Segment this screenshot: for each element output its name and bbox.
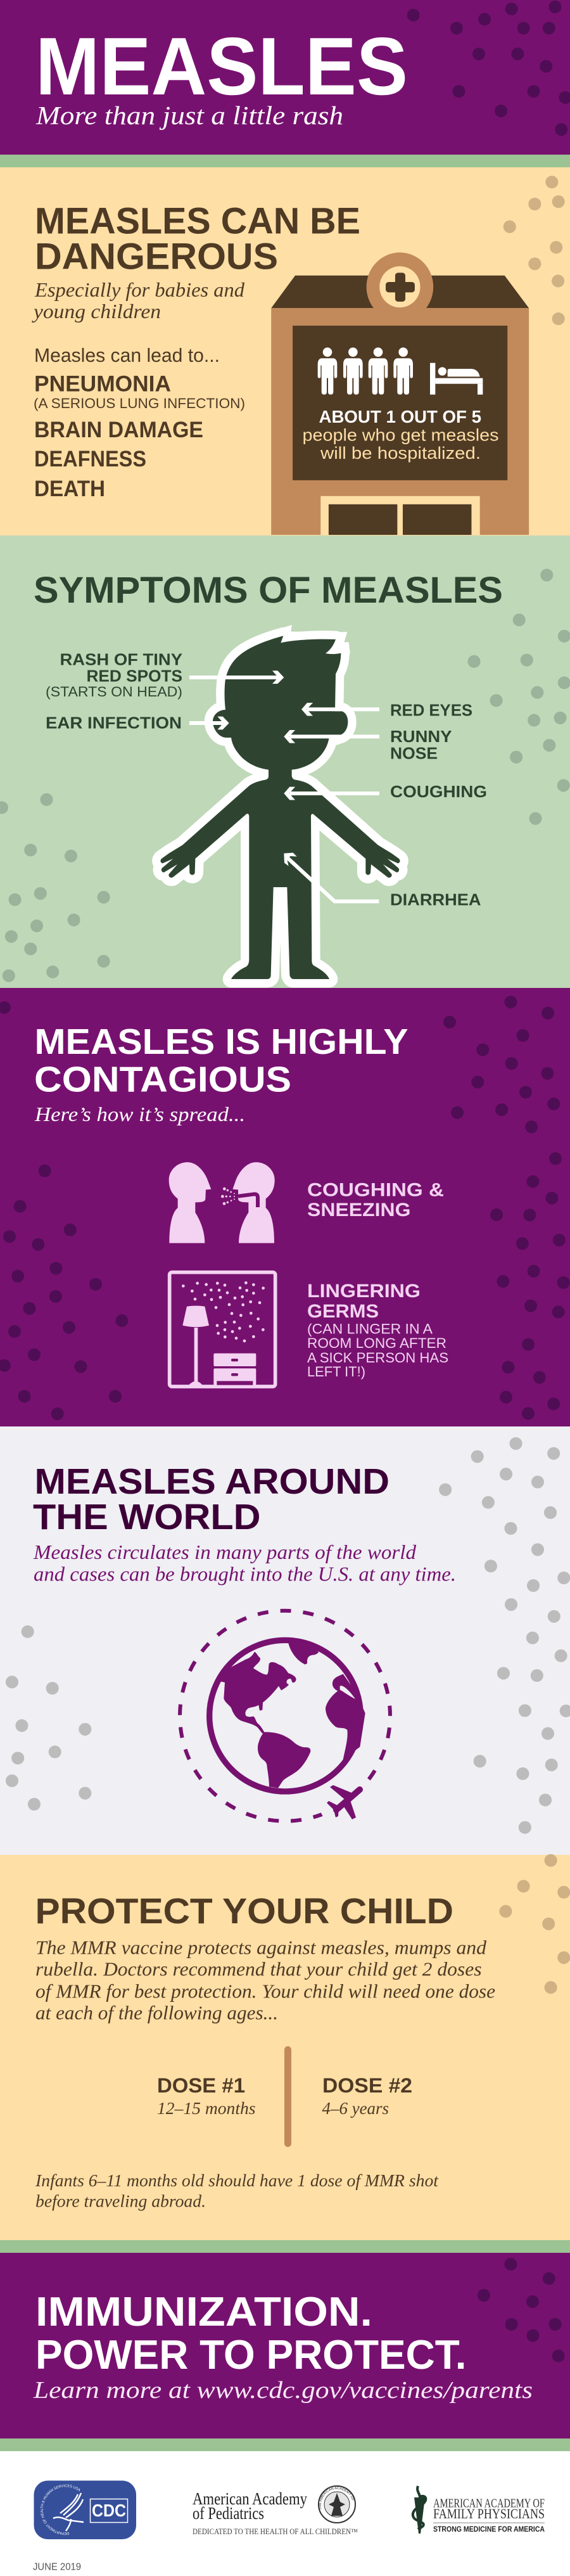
list of complications (34, 344, 245, 501)
dose 1: 12–15 months (157, 2099, 256, 2118)
text: lingering germs: LINGERING (307, 1281, 421, 1302)
description (33, 1541, 456, 1586)
note on infants: before traveling abroad. (35, 2191, 206, 2210)
panel: immunization call to action (0, 2253, 570, 2438)
body text: rubella. Doctors recommend that your child get 2 doses (35, 1958, 481, 1980)
symptom labels right (390, 701, 487, 909)
divider band (0, 2240, 570, 2253)
dose 1 (157, 2074, 256, 2118)
symptom labels left: RED SPOTS (86, 667, 182, 686)
callout: hospitalization statistic (303, 407, 499, 463)
symptom labels right: NOSE (390, 744, 438, 763)
list of complications: PNEUMONIA (34, 371, 171, 397)
note on infants (35, 2171, 440, 2210)
hospital building (271, 252, 529, 535)
body text: of MMR for best protection. Your child will need one dose (35, 1980, 495, 2002)
text: coughing and sneezing (307, 1180, 444, 1221)
panel: header (0, 0, 570, 155)
heading: MEASLES CAN BE (35, 200, 360, 242)
panel: protect your child (0, 1855, 570, 2241)
subheading: young children (32, 300, 161, 323)
callout: hospitalization statistic: will be hospitalized. (320, 444, 481, 463)
heading: CONTAGIOUS (34, 1060, 291, 1100)
logo: American Academy of Pediatrics: DEDICATED TO THE HEALTH OF ALL CHILDREN™ (193, 2527, 358, 2536)
symptom labels left: RASH OF TINY (60, 650, 182, 669)
heading: SYMPTOMS OF MEASLES (34, 570, 503, 611)
divider bar (284, 2046, 291, 2147)
panel: measles can be dangerous (0, 167, 570, 535)
subheading: Here’s how it’s spread... (34, 1103, 245, 1125)
panel: symptoms of measles (0, 535, 570, 988)
list of complications: DEATH (34, 477, 105, 501)
text: coughing and sneezing: SNEEZING (307, 1200, 410, 1221)
callout: hospitalization statistic: people who get measles (303, 426, 499, 445)
note on infants: Infants 6–11 months old should have 1 dose of MMR shot (35, 2171, 440, 2190)
symptom labels left: EAR INFECTION (46, 714, 182, 733)
panel: measles is highly contagious (0, 988, 570, 1426)
text: lingering germs: LEFT IT!) (307, 1364, 365, 1380)
description: and cases can be brought into the U.S. at any time. (34, 1563, 456, 1586)
subtitle: More than just a little rash (35, 101, 343, 130)
heading (33, 1461, 390, 1537)
icon: two people, coughing (169, 1162, 275, 1243)
heading: THE WORLD (33, 1497, 261, 1537)
text: lingering germs (307, 1281, 448, 1380)
list of complications: (A SERIOUS LUNG INFECTION) (34, 395, 245, 411)
icon: room with lingering germs (170, 1272, 276, 1387)
subheading: Especially for babies and (34, 278, 245, 301)
heading (34, 1022, 408, 1100)
text: lingering germs: ROOM LONG AFTER (307, 1335, 446, 1351)
logo: American Academy of Pediatrics: of Pediatrics (193, 2504, 264, 2523)
dose 2 (322, 2074, 412, 2118)
arrows to symptoms (189, 670, 379, 901)
text: lingering germs: (CAN LINGER IN A (307, 1321, 433, 1337)
slogan: POWER TO PROTECT. (35, 2331, 466, 2378)
divider band (0, 155, 570, 167)
icon: globe (210, 1640, 365, 1791)
symptom labels right: RUNNY (390, 727, 452, 746)
logo: American Academy of Pediatrics: THE AMERICAN ACADEMY OF (319, 2487, 355, 2509)
logo: American Academy of Family Physicians: STRONG MEDICINE FOR AMERICA (433, 2525, 545, 2534)
heading (35, 200, 360, 278)
panel: footer logos (33, 2480, 545, 2573)
list of complications: BRAIN DAMAGE (34, 418, 203, 442)
symptom labels right: RED EYES (390, 701, 472, 720)
panel: measles around the world (0, 1426, 570, 1855)
callout: hospitalization statistic: ABOUT 1 OUT OF 5 (319, 407, 481, 426)
list of complications: DEAFNESS (34, 447, 146, 471)
symptom labels right: COUGHING (390, 782, 487, 801)
heading: MEASLES IS HIGHLY (34, 1022, 408, 1062)
subheading (32, 278, 245, 323)
symptom labels right: DIARRHEA (390, 890, 481, 909)
logo: HHS and CDC: DEPARTMENT OF HEALTH & HUMAN SERVICES USA (41, 2484, 80, 2535)
logo: American Academy of Pediatrics (193, 2485, 358, 2536)
list of complications: Measles can lead to... (34, 344, 220, 366)
logo: HHS and CDC (34, 2480, 136, 2539)
icon: airplane (327, 1785, 360, 1819)
dose 2: DOSE #2 (322, 2074, 412, 2097)
heading: MEASLES AROUND (34, 1461, 390, 1502)
child silhouette (160, 625, 400, 979)
title: MEASLES (35, 21, 408, 112)
text: lingering germs: A SICK PERSON HAS (307, 1350, 448, 1366)
body text: at each of the following ages... (35, 2001, 278, 2024)
dose 1: DOSE #1 (157, 2074, 245, 2097)
dose 2: 4–6 years (322, 2099, 389, 2118)
learn more link: Learn more at www.cdc.gov/vaccines/parents (33, 2377, 533, 2404)
symptom labels left (46, 650, 182, 733)
symptom labels left: (STARTS ON HEAD) (46, 684, 182, 700)
text: lingering germs: GERMS (307, 1301, 379, 1322)
date: JUNE 2019 (33, 2561, 81, 2573)
slogan (35, 2288, 466, 2378)
slogan: IMMUNIZATION. (35, 2288, 372, 2335)
logo: American Academy of Family Physicians: FAMILY PHYSICIANS (433, 2506, 545, 2522)
logo: American Academy of Family Physicians (413, 2486, 545, 2534)
logo: American Academy of Pediatrics: American Academy (193, 2489, 307, 2508)
text: coughing and sneezing: COUGHING & (307, 1180, 444, 1200)
heading: DANGEROUS (35, 236, 278, 278)
divider band (0, 2438, 570, 2451)
body text (35, 1937, 495, 2024)
dashed flight path (180, 1611, 390, 1828)
icon: four people and a hospital bed (318, 347, 483, 395)
description: Measles circulates in many parts of the world (33, 1541, 417, 1563)
body text: The MMR vaccine protects against measles, mumps and (35, 1937, 487, 1958)
heading: PROTECT YOUR CHILD (35, 1891, 453, 1932)
logo: HHS and CDC: CDC (92, 2501, 126, 2520)
